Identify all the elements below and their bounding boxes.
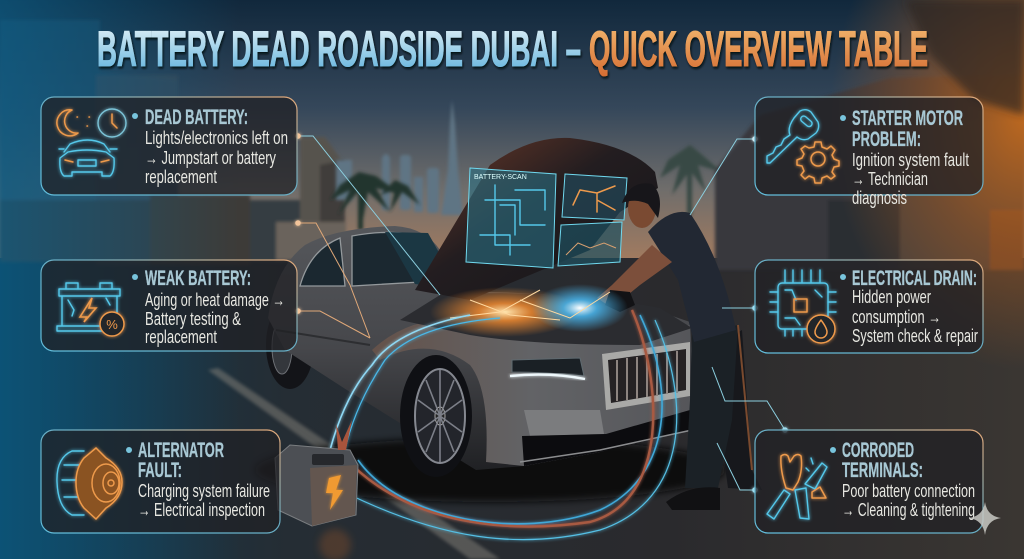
icon: moon, clock and car — [57, 109, 126, 176]
background: left villa — [0, 20, 346, 265]
red clamps — [336, 420, 352, 450]
boot — [666, 487, 720, 510]
glove — [605, 290, 635, 312]
car body — [268, 226, 692, 470]
text: weak battery detail: Battery testing & — [145, 309, 241, 329]
background: dark palm top right — [905, 0, 1024, 115]
icon: key and gear — [767, 110, 839, 183]
text: corroded terminals detail — [842, 481, 975, 520]
heading: starter motor problem: PROBLEM: — [852, 128, 921, 151]
text: alternator detail — [138, 481, 270, 520]
background: road — [0, 258, 1024, 559]
heading: starter motor problem — [852, 107, 963, 151]
windshield — [385, 232, 460, 290]
road lane marking — [208, 368, 500, 559]
connector end dots — [295, 133, 788, 493]
text: alternator detail: Charging system failure — [138, 481, 270, 501]
text: dead battery detail: Lights/electronics left on — [145, 128, 288, 148]
jump cables — [330, 310, 677, 540]
bullet — [840, 115, 846, 121]
hologram screens — [466, 168, 627, 268]
screen: battery schematic: BATTERY-SCAN — [474, 174, 527, 181]
text: dead battery detail — [145, 128, 288, 187]
front wheel — [400, 355, 472, 477]
heading: corroded terminals — [842, 439, 923, 482]
text: weak battery detail — [145, 290, 285, 347]
rear leg and boot — [716, 330, 762, 490]
bullet — [132, 113, 138, 119]
bumper — [524, 410, 604, 436]
hood top — [400, 293, 692, 345]
panel: weak battery — [41, 260, 297, 351]
text: electrical drain detail: Hidden power — [852, 287, 931, 307]
heading: corroded terminals: CORRODED — [842, 439, 914, 462]
screen: circuit — [562, 174, 627, 220]
left blue glow — [0, 0, 240, 559]
text: weak battery detail: replacement — [145, 327, 217, 347]
screen: line chart — [558, 222, 622, 266]
text: alternator detail: → Electrical inspection — [138, 500, 265, 520]
text: electrical drain detail: consumption → — [852, 307, 941, 327]
connector lines — [298, 136, 785, 490]
background: dusk sky — [0, 0, 1024, 270]
background: Dubai skyline — [336, 100, 463, 215]
headlight — [510, 358, 585, 379]
front fender and nose — [372, 319, 690, 466]
torso — [648, 212, 736, 342]
front leg — [685, 325, 738, 488]
text: electrical drain detail — [852, 287, 978, 346]
head — [622, 183, 660, 228]
bullet — [132, 274, 138, 280]
heading: alternator fault: FAULT: — [138, 459, 182, 482]
text: starter motor detail: → Technician — [852, 169, 928, 189]
icon: clamp, glove and debris — [767, 454, 827, 519]
heading: dead battery: DEAD BATTERY: — [145, 106, 248, 129]
text: starter motor detail: Ignition system fault — [852, 150, 969, 170]
panel: alternator fault — [41, 430, 280, 533]
arm — [597, 245, 672, 308]
leg rim light — [738, 325, 752, 470]
text: weak battery detail: Aging or heat damage → — [145, 290, 285, 310]
heading: alternator fault: ALTERNATOR — [138, 439, 224, 462]
panel: starter motor problem — [755, 97, 983, 208]
road orange reflection — [319, 529, 351, 559]
car shadow — [255, 438, 725, 502]
heading: alternator fault — [138, 439, 224, 482]
right orange glow — [700, 0, 1024, 420]
bullet — [830, 447, 836, 453]
jump starter box — [275, 420, 358, 526]
icon: alternator — [57, 448, 122, 519]
icon: battery with percent — [57, 283, 124, 336]
panel: dead battery — [41, 97, 297, 195]
engine sparks — [430, 284, 628, 337]
heading: weak battery: WEAK BATTERY: — [145, 267, 251, 290]
bullet — [840, 274, 846, 280]
title: BATTERY DEAD ROADSIDE DUBAI – — [97, 21, 581, 77]
background: right villa — [715, 75, 1024, 270]
icon: battery with percent: % — [106, 317, 118, 332]
screen: battery schematic — [466, 168, 556, 268]
heading: corroded terminals: TERMINALS: — [842, 459, 923, 482]
grille — [602, 342, 690, 410]
text: dead battery detail: → Jumpstart or battery — [145, 148, 276, 168]
door seam — [276, 330, 370, 345]
rear wheel — [266, 301, 314, 389]
bullet — [126, 447, 132, 453]
open hood — [415, 138, 658, 300]
side windows — [300, 232, 420, 286]
car — [255, 226, 725, 502]
panel: electrical drain — [755, 260, 983, 353]
icon: chip and drop — [770, 270, 836, 343]
background: palm trees — [330, 145, 722, 230]
text: starter motor detail: diagnosis — [852, 188, 907, 208]
panel: corroded terminals — [755, 430, 983, 533]
sparkle mark — [969, 502, 1001, 535]
text: starter motor detail — [852, 150, 969, 208]
mechanic — [597, 183, 762, 510]
text: dead battery detail: replacement — [145, 167, 217, 187]
